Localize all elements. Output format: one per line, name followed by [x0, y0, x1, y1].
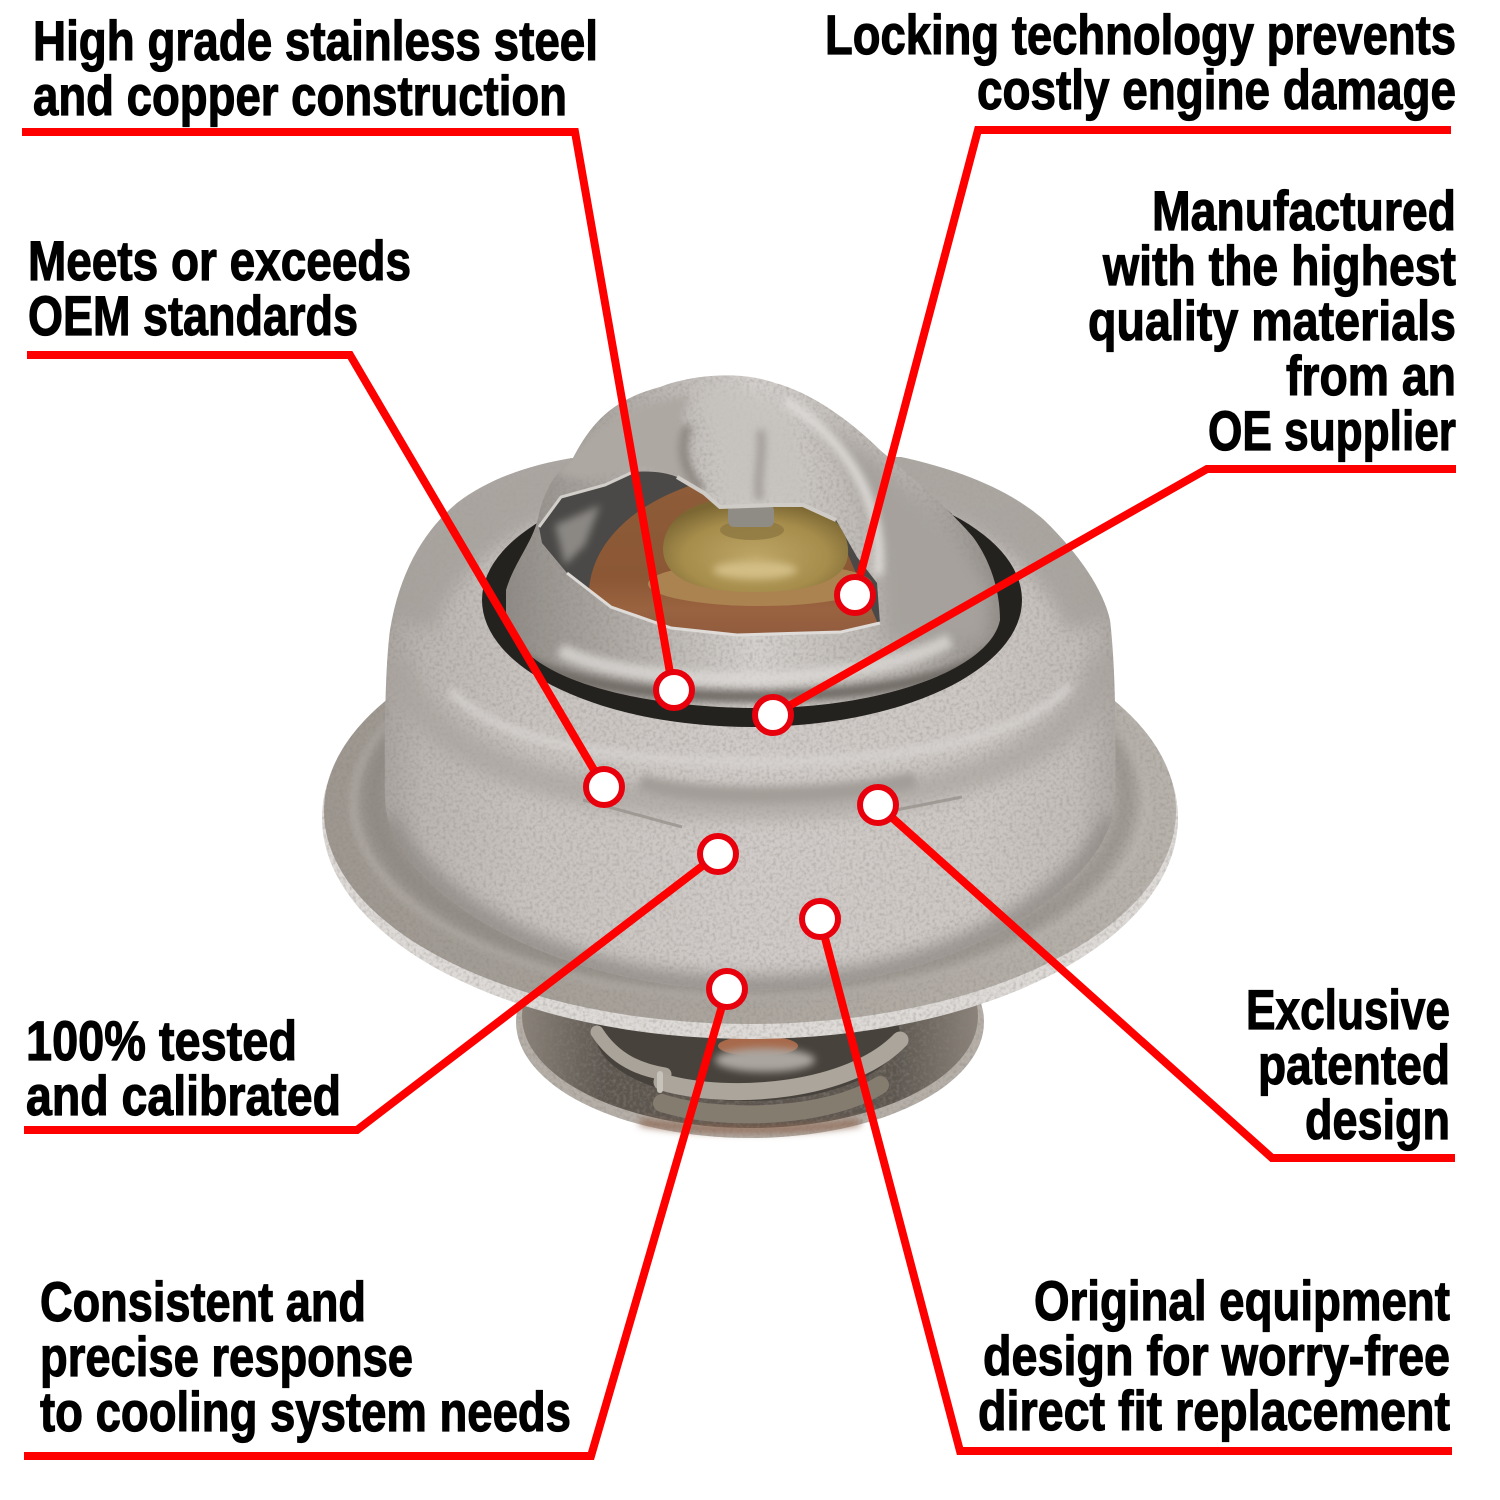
marker dot: [837, 577, 873, 613]
label text: and calibrated: [26, 1064, 341, 1127]
copper bulb: [589, 484, 885, 640]
dark inner ring: [482, 473, 1022, 727]
label text: precise response: [40, 1325, 413, 1388]
dome right flank: [832, 428, 990, 640]
leader line: [22, 132, 673, 690]
callout: tested and calibrated: [24, 836, 736, 1130]
brass bulb: [663, 500, 848, 592]
bridge lower edge: [677, 477, 836, 520]
label text: High grade stainless steel: [33, 9, 598, 72]
shoulder highlight: [450, 685, 1070, 762]
callout: OEM standards: [27, 229, 622, 805]
dome left lobe: [559, 396, 688, 481]
marker dot: [802, 901, 838, 937]
leader line: [24, 989, 727, 1456]
inner cup and dome: [500, 370, 1010, 715]
marker dot: [709, 971, 745, 1007]
central crease shadow: [640, 780, 915, 795]
spring coils: [597, 1032, 900, 1114]
flange inner groove: [354, 610, 1146, 996]
leader line: [24, 854, 718, 1130]
left indent: [583, 800, 682, 827]
right indent: [896, 797, 962, 810]
cup bottom shadow: [510, 650, 995, 696]
label text: Exclusive: [1246, 978, 1450, 1041]
dark wedge beside dome: [896, 466, 952, 522]
lower spring cup: [516, 904, 984, 1138]
leader line: [878, 805, 1455, 1158]
brass highlight: [713, 561, 797, 579]
brass collar: [648, 569, 872, 606]
callout: original equipment design: [802, 901, 1452, 1451]
label text: Consistent and: [40, 1270, 366, 1333]
marker dot: [586, 769, 622, 805]
flange: [322, 597, 1178, 1039]
leader line: [773, 469, 1456, 715]
spring centre: [715, 1048, 815, 1072]
label text: from an: [1286, 344, 1456, 407]
label text: and copper construction: [33, 64, 567, 127]
brass neck: [720, 522, 784, 540]
dome opening rim highlight: [539, 472, 633, 527]
label text: 100% tested: [26, 1009, 297, 1072]
label text: [26, 1009, 341, 1127]
callout: locking technology: [825, 3, 1456, 613]
label text: Meets or exceeds: [28, 229, 411, 292]
marker dot: [656, 672, 692, 708]
piston pin: [728, 505, 774, 527]
label text: [40, 1270, 571, 1443]
label text: [825, 3, 1456, 121]
dome centre bridge highlight: [700, 391, 806, 504]
label text: to cooling system needs: [40, 1380, 571, 1443]
label text: [978, 1269, 1450, 1442]
main body dome: [380, 450, 1120, 1010]
label text: [33, 9, 598, 127]
label text: [28, 229, 411, 347]
leader line: [27, 355, 604, 787]
marker dot: [700, 836, 736, 872]
dome right highlight: [785, 400, 879, 575]
opening in dome: [539, 472, 880, 634]
marker dot: [860, 787, 896, 823]
leader line: [855, 130, 1451, 595]
label text: patented: [1258, 1033, 1450, 1096]
cup band highlights: [560, 640, 950, 679]
callout: highest quality materials: [755, 179, 1456, 733]
copper stem: [718, 1036, 798, 1056]
bridge crease: [759, 430, 761, 500]
callout: stainless steel and copper: [22, 9, 692, 708]
label text: [1088, 179, 1456, 462]
flange shading ring: [374, 611, 1126, 983]
dark interior highlight: [555, 505, 600, 565]
marker dot: [755, 697, 791, 733]
label text: design: [1305, 1088, 1450, 1151]
leader line: [820, 919, 1452, 1451]
thermostat product photo illustration: [322, 370, 1178, 1138]
label text: [1246, 978, 1450, 1151]
body lower shading: [385, 820, 1115, 988]
dome dark crease: [684, 425, 702, 490]
copper glint on cup rim: [640, 1122, 860, 1130]
callout: patented design: [860, 787, 1455, 1158]
upper shoulder shading: [400, 465, 1100, 620]
shoulder shadow band: [395, 660, 1105, 805]
callout: consistent response: [24, 971, 745, 1456]
opening bottom rim: [567, 573, 880, 635]
spring recess: [596, 969, 900, 1101]
label text: OEM standards: [28, 284, 358, 347]
